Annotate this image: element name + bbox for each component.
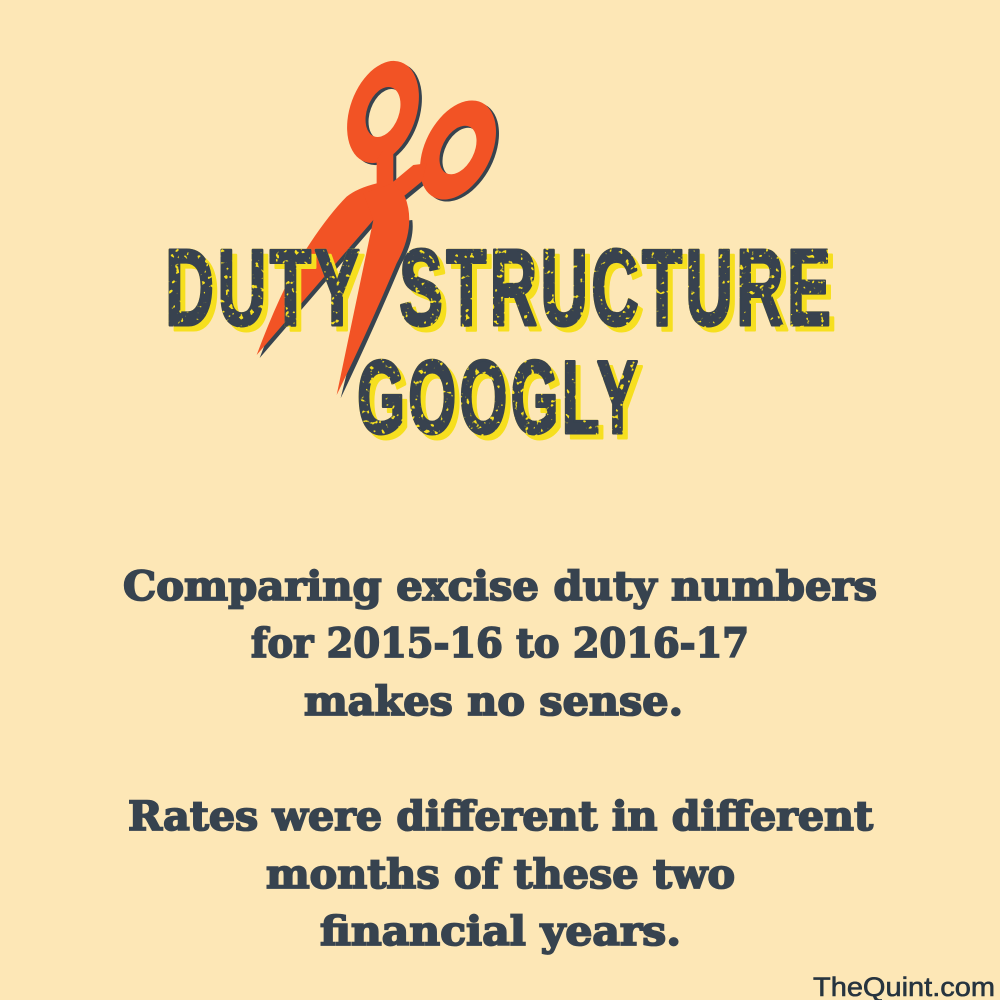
title lettering: [165, 227, 834, 456]
title shadow: DUTY: [170, 232, 368, 354]
text block: rates were different: months of these two: [266, 851, 735, 898]
text block: rates were different: Rates were different in different: [128, 793, 874, 840]
text block: rates were different: financial years.: [320, 908, 681, 955]
title lettering: GOOGLY: [357, 340, 641, 456]
title shadow: GOOGLY: [357, 340, 641, 456]
text block: comparing excise duty numbers: for 2015-16 to 2016-17: [251, 620, 749, 667]
title: Duty Structure Googly: [165, 227, 839, 461]
text block: comparing excise duty numbers: [123, 563, 877, 725]
title shadow: DUTY: [165, 227, 363, 349]
icon: scissors right blade: [337, 183, 413, 398]
title lettering: DUTY: [165, 227, 363, 349]
text block: comparing excise duty numbers: Comparing excise duty numbers: [123, 563, 877, 610]
icon: scissors handles and left blade: [257, 51, 514, 358]
text block: comparing excise duty numbers: makes no sense.: [304, 678, 683, 725]
title shadow: [165, 227, 839, 461]
title shadow: GOOGLY: [362, 345, 646, 461]
text block: rates were different: [128, 793, 874, 955]
